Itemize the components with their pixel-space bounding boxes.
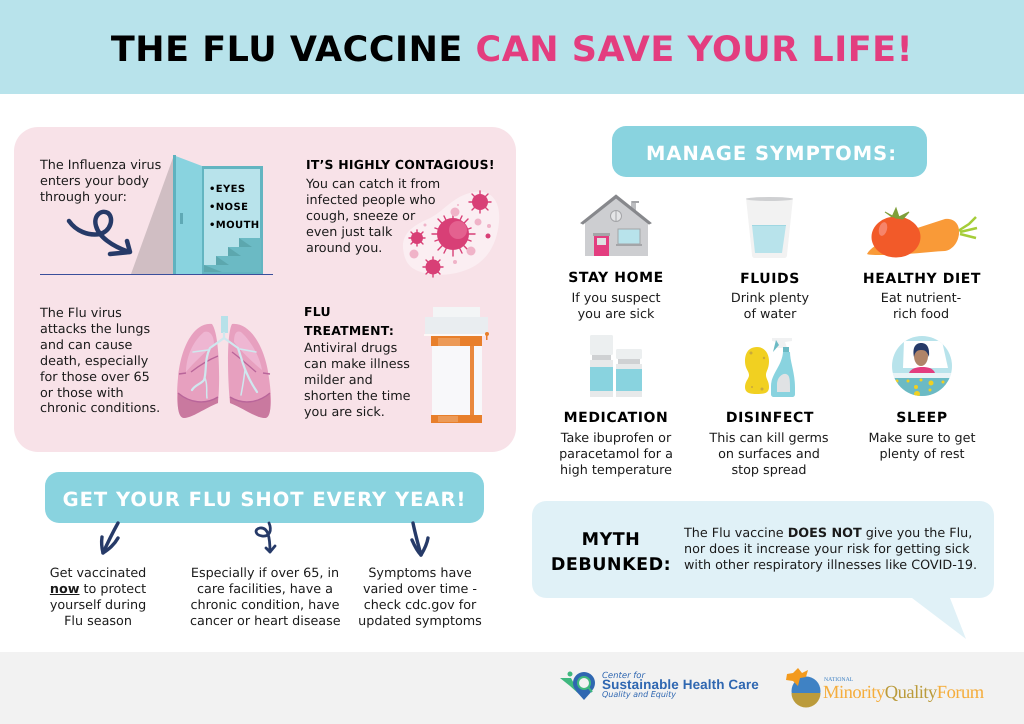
text: symptoms varied: varied over time - — [363, 582, 477, 597]
heading: flu treatment: TREATMENT: — [304, 322, 394, 338]
manage symptoms text: MANAGE SYMPTOMS: — [646, 142, 897, 165]
text: sleep — [868, 431, 976, 462]
heading: medication: MEDICATION — [564, 410, 668, 426]
heading: contagious: IT’S HIGHLY CONTAGIOUS! — [306, 157, 495, 172]
myth text: The Flu vaccine DOES NOT give you the Flu, — [684, 526, 972, 541]
text: treatment: can make illness — [304, 357, 410, 372]
text: disinfect — [709, 431, 829, 478]
text: disinfect: This can kill germs — [709, 431, 829, 446]
text: symptoms varied: Symptoms have — [368, 566, 472, 581]
logo: center for sustainable health care: Quality and Equity — [602, 690, 676, 699]
text: sleep: plenty of rest — [880, 447, 964, 462]
text: get vaccinated: yourself during — [50, 598, 146, 613]
heading: sleep: SLEEP — [896, 410, 948, 426]
text: disinfect: stop spread — [731, 463, 807, 478]
myth heading: MYTH — [582, 530, 640, 550]
text: contagious: infected people who — [306, 193, 436, 208]
door labels: •MOUTH — [209, 220, 260, 231]
heading: disinfect: DISINFECT — [726, 410, 814, 426]
text: get vaccinated: now to protect — [50, 582, 146, 597]
panel: flu facts — [14, 127, 516, 452]
text: influenza entry: enters your body — [40, 174, 149, 189]
text: contagious — [306, 177, 440, 256]
icon: sleeping person — [892, 336, 952, 396]
myth text: nor does it increase your risk for getting sick — [684, 542, 969, 557]
logo: center for sustainable health care: Sustainable Health Care — [602, 677, 759, 692]
banner: manage symptoms — [612, 126, 927, 177]
door labels: •EYES — [209, 184, 246, 195]
text: treatment: shorten the time — [304, 389, 411, 404]
text: especially — [190, 566, 341, 629]
heading: flu treatment: FLU — [304, 304, 331, 319]
door labels: •NOSE — [209, 202, 248, 213]
door labels — [209, 184, 260, 231]
text: lungs: The Flu virus — [40, 306, 122, 321]
footer band — [0, 652, 1024, 724]
myth text — [684, 526, 977, 573]
text: sleep: Make sure to get — [868, 431, 976, 446]
text: especially: chronic condition, have — [191, 598, 339, 613]
text: medication: high temperature — [560, 463, 672, 478]
text: medication: Take ibuprofen or — [561, 431, 671, 446]
text: influenza entry — [40, 158, 161, 205]
text: treatment: milder and — [304, 373, 373, 388]
logo: national minority quality forum — [786, 668, 984, 708]
text: treatment: you are sick. — [304, 405, 385, 420]
text: medication — [559, 431, 673, 478]
text: healthy diet — [881, 291, 961, 322]
logo: national minority quality forum: NATIONAL — [824, 677, 853, 683]
text: disinfect: on surfaces and — [718, 447, 820, 462]
text: lungs: for those over 65 — [40, 370, 150, 385]
text: lungs: or those with — [40, 386, 124, 401]
text: lungs: and can cause — [40, 338, 132, 353]
text: symptoms varied — [358, 566, 482, 629]
text: influenza entry: through your: — [40, 190, 127, 205]
text: lungs: chronic conditions. — [40, 401, 160, 416]
text: symptoms varied: check cdc.gov for — [364, 598, 476, 613]
text: lungs: death, especially — [40, 354, 148, 369]
text: lungs — [40, 306, 160, 416]
text: get vaccinated — [50, 566, 146, 629]
logo: center for sustainable health care — [560, 671, 759, 700]
text: fluids: Drink plenty — [731, 291, 809, 306]
title: THE FLU VACCINE CAN SAVE YOUR LIFE! — [111, 30, 913, 70]
text: treatment — [304, 341, 411, 420]
text: influenza entry: The Influenza virus — [40, 158, 161, 173]
text: especially: Especially if over 65, in — [191, 566, 339, 581]
text: contagious: cough, sneeze or — [306, 209, 415, 224]
heading: healthy diet: HEALTHY DIET — [863, 271, 981, 287]
text: contagious: You can catch it from — [306, 177, 440, 192]
text: especially: care facilities, have a — [197, 582, 333, 597]
text: stay home: you are sick — [578, 307, 654, 322]
text: healthy diet: Eat nutrient- — [881, 291, 961, 306]
heading: stay home: STAY HOME — [568, 270, 664, 286]
banner text: GET YOUR FLU SHOT EVERY YEAR! — [63, 488, 466, 511]
text: get vaccinated: Get vaccinated — [50, 566, 146, 581]
text: lungs: attacks the lungs — [40, 322, 150, 337]
text: medication: paracetamol for a — [559, 447, 673, 462]
text: symptoms varied: updated symptoms — [358, 614, 482, 629]
text: fluids — [731, 291, 809, 322]
text: especially: cancer or heart disease — [190, 614, 341, 629]
logo: national minority quality forum: MinorityQualityForum — [823, 683, 984, 703]
text: healthy diet: rich food — [893, 307, 949, 322]
heading: flu treatment — [304, 304, 394, 338]
text: treatment: Antiviral drugs — [304, 341, 397, 356]
text: get vaccinated: Flu season — [64, 614, 132, 629]
text: stay home — [571, 291, 661, 322]
heading: fluids: FLUIDS — [740, 271, 800, 287]
myth heading — [551, 530, 671, 575]
header band — [0, 0, 1024, 94]
banner: flu shot — [45, 472, 484, 523]
logo: center for sustainable health care: Center for — [602, 671, 645, 681]
text: stay home: If you suspect — [571, 291, 661, 306]
text: contagious: even just talk — [306, 225, 392, 240]
text: contagious: around you. — [306, 241, 382, 256]
myth text: with other respiratory illnesses like COVID-19. — [684, 558, 977, 573]
text: fluids: of water — [744, 307, 796, 322]
myth heading: DEBUNKED: — [551, 555, 671, 575]
